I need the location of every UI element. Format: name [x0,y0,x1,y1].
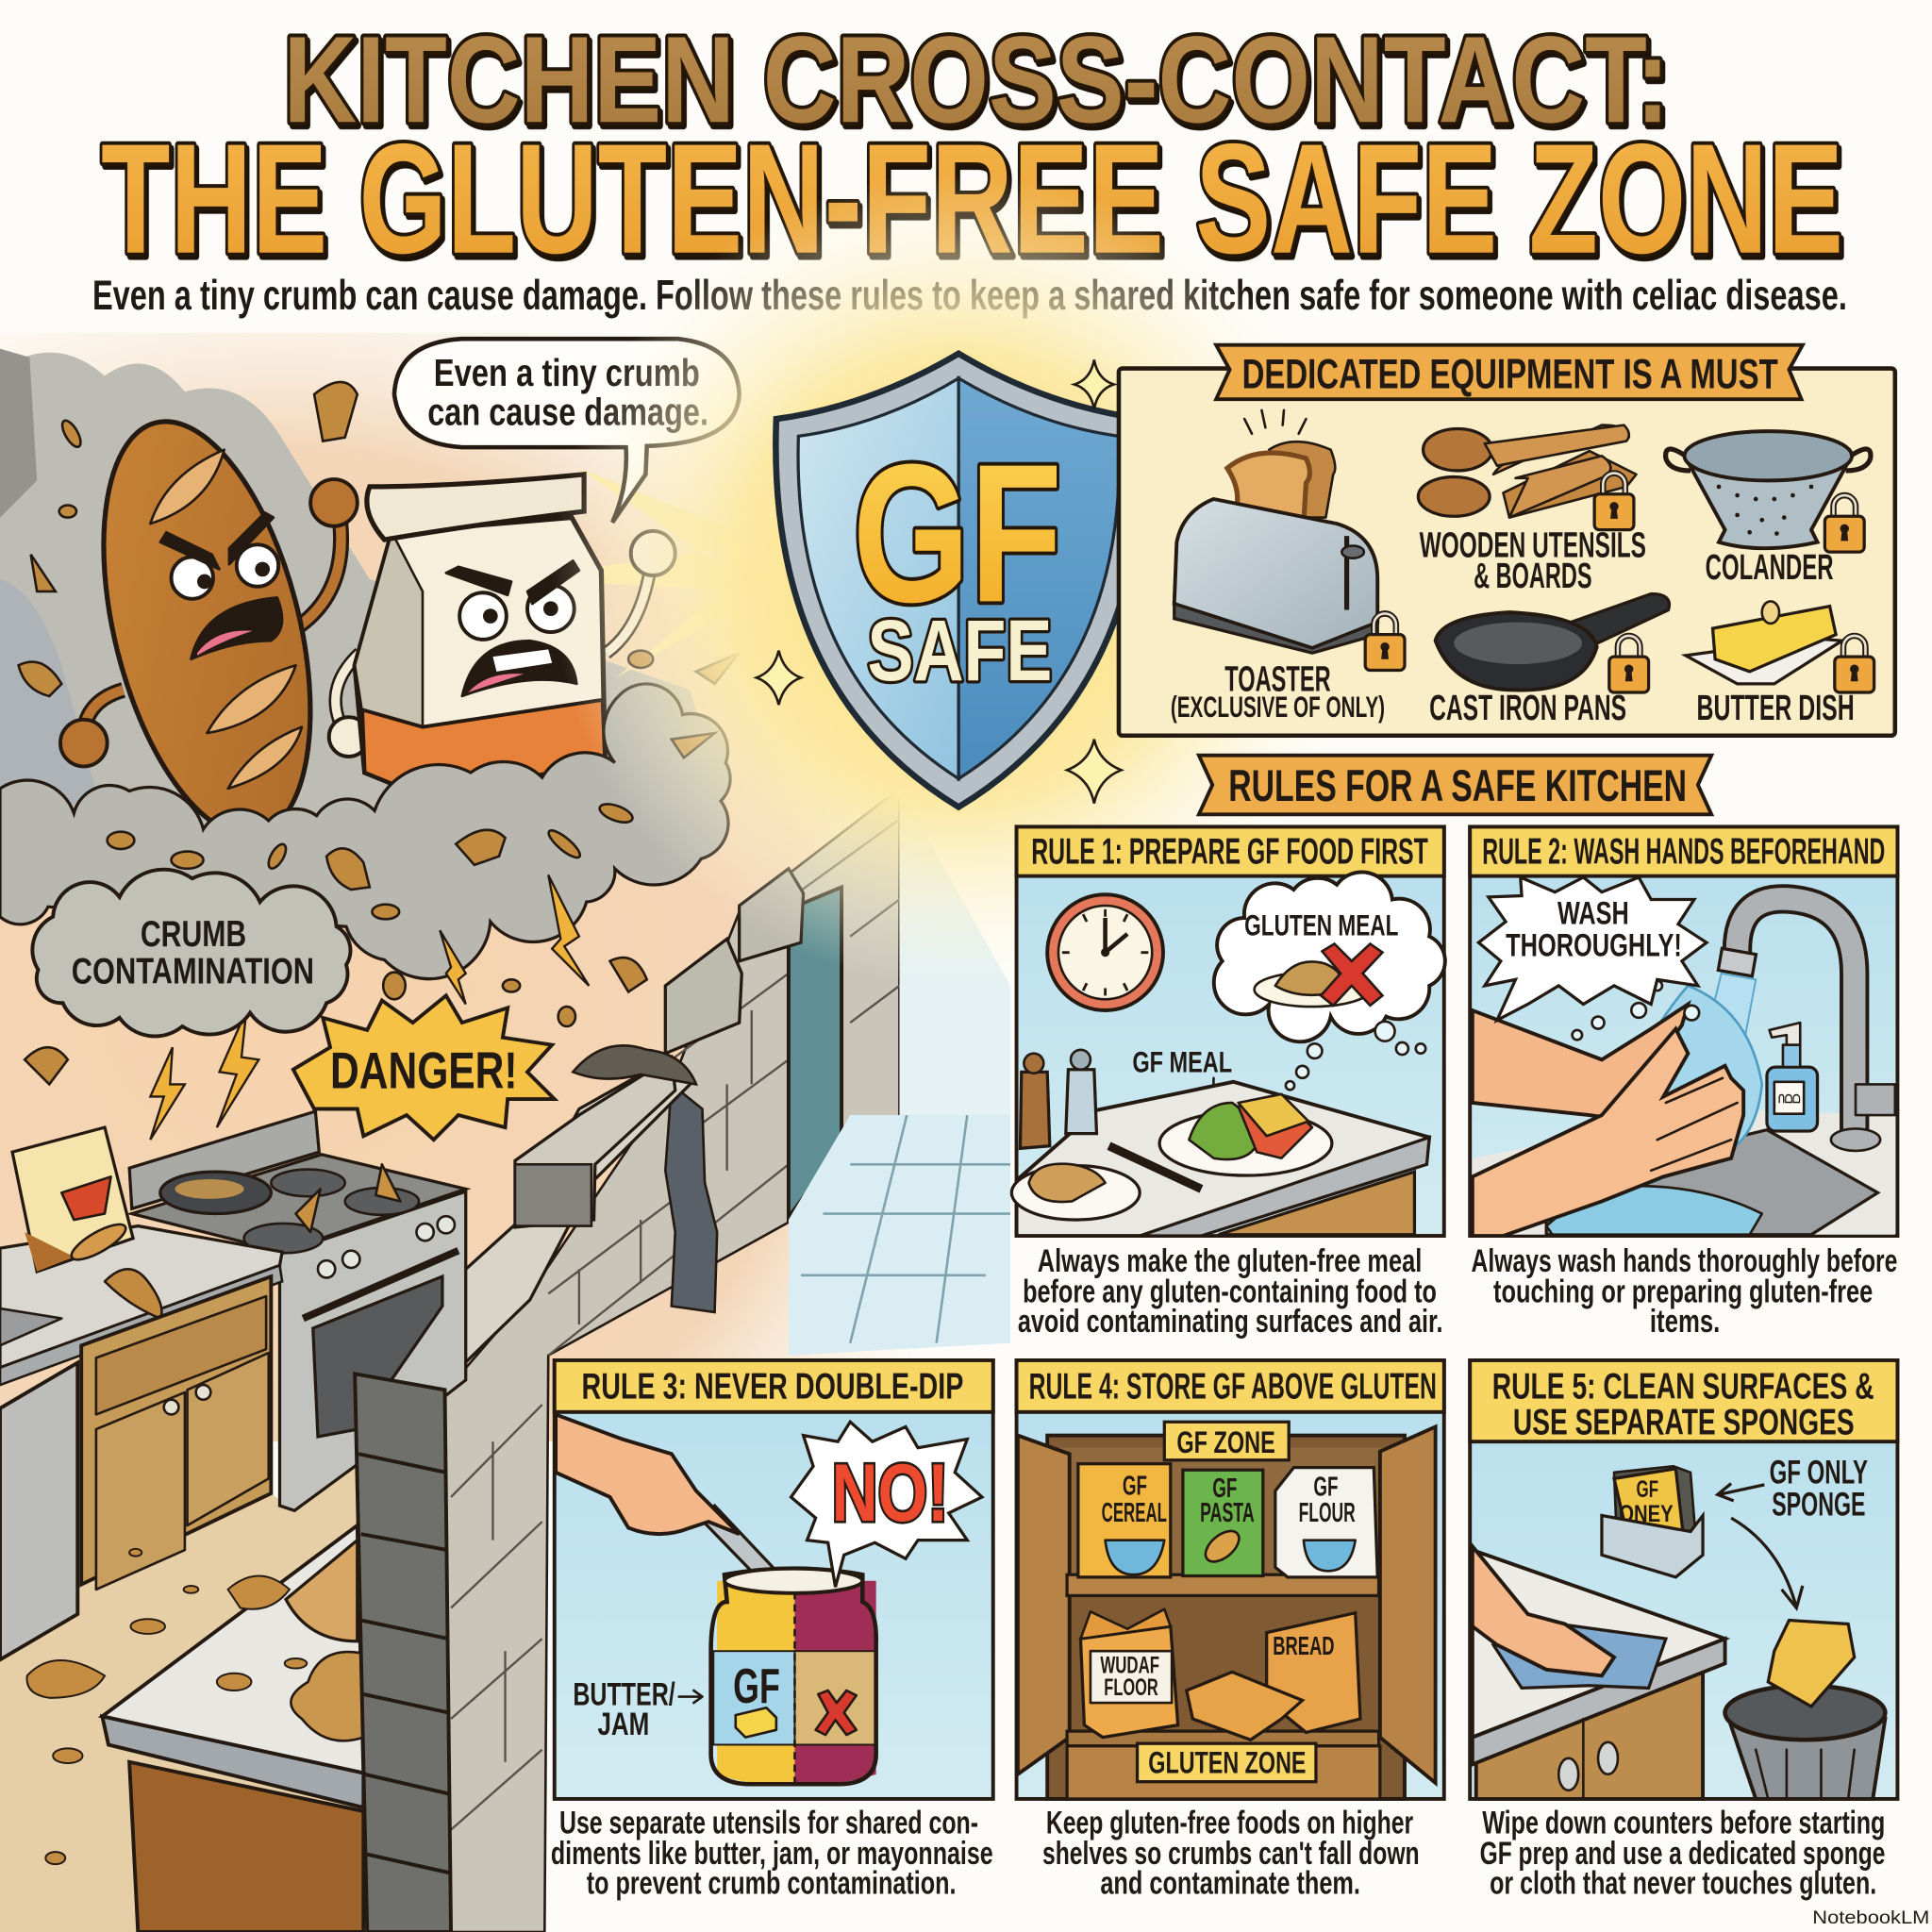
blue-grey smoke shade [0,579,98,813]
icon: cast iron pan [1436,594,1669,691]
rule 4 description: shelves so crumbs can't fall down [1042,1836,1420,1872]
bread character [60,400,358,857]
label: butter jam: BUTTER/ [573,1677,675,1713]
soap bubbles [1573,981,1699,1040]
label: gf only sponge: SPONGE [1772,1487,1865,1524]
rule 3 description [551,1806,993,1902]
crack in wall [665,1084,717,1312]
icon: clock [1047,894,1163,1010]
icon: colander lock [1824,495,1864,552]
box: gf cereal: CEREAL [1102,1498,1167,1528]
label: wooden utensils: WOODEN UTENSILS [1420,525,1646,565]
panel: dedicated equipment [1119,345,1895,736]
glow behind shield [542,173,1380,986]
cabinet [1018,1426,1436,1799]
icon: butter lock [1835,636,1874,692]
shield [775,354,1143,808]
wall: right brick face [445,789,899,1932]
label: gf meal: GF MEAL [1132,1045,1232,1078]
panel: rule 1 [1011,826,1445,1236]
shield right half [958,378,1119,778]
rubble on wall [573,1045,696,1084]
arrow: gf meal [1213,1078,1223,1109]
label: colander: COLANDER [1706,548,1834,588]
label: toaster [1171,660,1385,724]
label: butter jam [573,1677,675,1742]
icon: butter dish [1686,601,1842,684]
rule 1 description: before any gluten-containing food to [1023,1274,1437,1310]
flour bag character [329,475,675,796]
rule 4 header: RULE 4: STORE GF ABOVE GLUTEN [1029,1366,1437,1407]
soap bottle [1767,1023,1818,1131]
speech bubble: tiny crumb [394,339,740,523]
shield left half [798,378,958,778]
wash thoroughly burst: WASH [1557,896,1629,932]
thought cloud: gluten meal: GLUTEN MEAL [1244,908,1398,941]
banner: rules for a safe kitchen [1199,756,1711,814]
speech bubble: tiny crumb: can cause damage. [427,391,708,434]
box: gf cereal: GF [1123,1471,1147,1501]
box: gf cereal [1078,1464,1171,1577]
falling sponge [1768,1621,1855,1707]
crushed box [1187,1672,1303,1740]
rule 1 description [1018,1243,1442,1340]
label: wooden utensils [1420,525,1646,596]
box: wudaf floor: FLOOR [1104,1675,1158,1701]
rule 4 description: and contaminate them. [1100,1866,1360,1902]
title: KITCHEN CROSS-CONTACT: [283,10,1670,148]
rule 3 description: Use separate utensils for shared con- [559,1806,978,1841]
bag eyes [459,585,575,640]
teal door in wall [789,887,841,1217]
icon: red x [1321,943,1382,1006]
counter [1017,1082,1429,1236]
speech bubble: tiny crumb: Even a tiny crumb [434,351,700,394]
panel: rule 4 [1017,1360,1444,1799]
floor crumbs [26,1549,307,1864]
arrow to bin [1731,1518,1803,1607]
title [101,10,1843,287]
dishwasher [0,1363,77,1659]
rule 5 description [1480,1806,1885,1902]
bag side panel [355,532,423,729]
plate: gf meal [1159,1094,1332,1175]
faucet [1718,899,1895,1151]
panel: rule 3 [555,1360,993,1799]
box: gf flour: FLOUR [1299,1498,1356,1528]
brick courses [451,820,899,1830]
corridor wall [899,789,1010,1115]
label: butter jam: JAM [597,1707,649,1742]
bag roll top [367,475,584,540]
wall block middle [665,939,741,1054]
rule 4 description [1042,1806,1420,1902]
bread eyes [172,544,278,599]
banner: dedicated equipment [1216,345,1803,399]
icon: toaster [1174,410,1377,653]
danger burst [293,995,555,1140]
foam [1614,986,1762,1183]
rule 1 description: Always make the gluten-free meal [1038,1243,1422,1279]
wash thoroughly burst: THOROUGHLY! [1506,928,1682,964]
SAFE: SAFE [868,603,1052,699]
icon: toaster lock [1365,613,1405,671]
box: gf pasta: GF [1212,1474,1237,1504]
hand with knife [556,1414,798,1599]
icon: pan lock [1609,636,1649,692]
bag body [355,518,605,796]
rule 3 header [555,1360,993,1412]
cabinets [81,1276,271,1590]
upper counter [0,1226,282,1385]
icon: colander [1666,431,1871,548]
box: gf pasta: PASTA [1200,1498,1255,1528]
lightning bolts [150,874,589,1140]
crumb contamination cloud [32,870,350,1036]
bread mouth [191,597,282,659]
rule 4 header [1017,1360,1444,1412]
gluten zone label [1138,1743,1316,1782]
rule 1 header: RULE 1: PREPARE GF FOOD FIRST [1031,832,1428,873]
panel: rule 5 [1470,1360,1897,1799]
counter and cabinet [1473,1550,1725,1799]
wall block high [740,869,804,961]
soap bottle: ᑎᗝᗝ [1778,1093,1800,1106]
blue cloth [1493,1624,1666,1688]
panel: rule 2 [1470,826,1897,1236]
wall block top [515,1058,675,1227]
box: wudaf floor: WUDAF [1100,1654,1159,1679]
thought bubbles [1286,1022,1425,1090]
label: wooden utensils: & BOARDS [1474,557,1592,596]
bag brows [446,560,579,604]
rule 2 description: items. [1650,1304,1720,1340]
no burst: NO! [832,1448,949,1539]
orange base [362,700,605,796]
rule 3 description: diments like butter, jam, or mayonnaise [551,1836,993,1872]
wash thoroughly burst [1478,877,1707,1020]
bread slashes [150,450,302,789]
box: gf pasta [1183,1470,1263,1576]
water stream [1700,974,1756,1078]
label: cast iron pans: CAST IRON PANS [1429,689,1626,728]
box: gf flour [1275,1468,1377,1577]
bread brows [160,512,274,569]
banner: rules for a safe kitchen: RULES FOR A SAFE KITCHEN [1228,760,1687,810]
crumbs in the cloud [19,382,740,1084]
back hand [1473,1004,1688,1122]
spoon [1109,1146,1201,1189]
no burst [791,1422,982,1587]
arrow: butter jam [679,1690,702,1703]
bag mouth [462,641,576,696]
crumb cloud [0,684,730,979]
rule 5 header [1470,1360,1897,1442]
lower counter top [102,1525,363,1932]
box: gf flour: GF [1313,1473,1338,1503]
box: bread [1267,1613,1360,1732]
trash bin [1725,1686,1885,1799]
icon: wooden utensils and boards [1418,425,1637,518]
crumb contamination cloud: CONTAMINATION [72,951,314,991]
box: wudaf floor [1080,1609,1178,1738]
gold shield rays [518,468,764,677]
label: butter dish: BUTTER DISH [1697,689,1855,728]
flour box on counter [12,1127,133,1272]
rule 3 description: to prevent crumb contamination. [587,1866,957,1902]
corridor floor tiles [789,1115,1010,1356]
sponge holder [1602,1466,1703,1577]
GF: GF [853,424,1062,643]
rule 1 header [1017,826,1444,876]
notebooklm mark: NotebookLM [1812,1907,1929,1928]
rule 4 description: Keep gluten-free foods on higher [1046,1806,1413,1841]
scene: contamination side of kitchen [0,333,1010,1932]
wall end cap [355,1374,451,1932]
sparkles [757,359,1122,804]
pepper and salt shakers [1020,1050,1096,1148]
rule 2 description [1472,1243,1897,1340]
icon: utensils lock [1594,474,1634,530]
rule 1 description: avoid contaminating surfaces and air. [1018,1304,1442,1340]
label: toaster: (EXCLUSIVE OF ONLY) [1171,691,1385,724]
crumb contamination cloud: CRUMB [141,914,246,955]
hands with suds [1473,986,1762,1236]
label: gf only sponge: GF ONLY [1770,1455,1868,1491]
jam jar: GF [733,1659,780,1714]
danger burst: DANGER! [330,1041,518,1099]
wiping hand [1473,1546,1614,1675]
front hand [1473,1029,1743,1236]
gluten zone label: GLUTEN ZONE [1148,1745,1306,1780]
bread loaf [66,400,348,857]
stove [129,1111,466,1510]
peach background wash [0,333,912,1441]
plate: gluten sandwich [1011,1164,1140,1220]
top surface of wall [361,1058,690,1385]
thought cloud: gluten meal [1214,872,1445,1041]
shield outer [775,354,1143,808]
gf zone label: GF ZONE [1176,1424,1275,1459]
box: bread: BREAD [1273,1631,1335,1660]
rule 3 header: RULE 3: NEVER DOUBLE-DIP [581,1366,963,1407]
bread arms [84,511,341,745]
bag arms [336,567,651,733]
label: toaster: TOASTER [1224,660,1331,700]
sponge holder: GF [1637,1477,1658,1503]
label: gf only sponge [1770,1455,1868,1524]
sponge holder: ONEY [1619,1502,1674,1527]
jam jar [711,1569,876,1785]
gf zone label [1164,1422,1289,1460]
floor [0,1460,370,1932]
dark smoke corner [0,349,37,518]
arrow to holder [1718,1484,1764,1501]
counter and sink [1473,1109,1895,1235]
grey smoke backdrop [0,353,727,887]
